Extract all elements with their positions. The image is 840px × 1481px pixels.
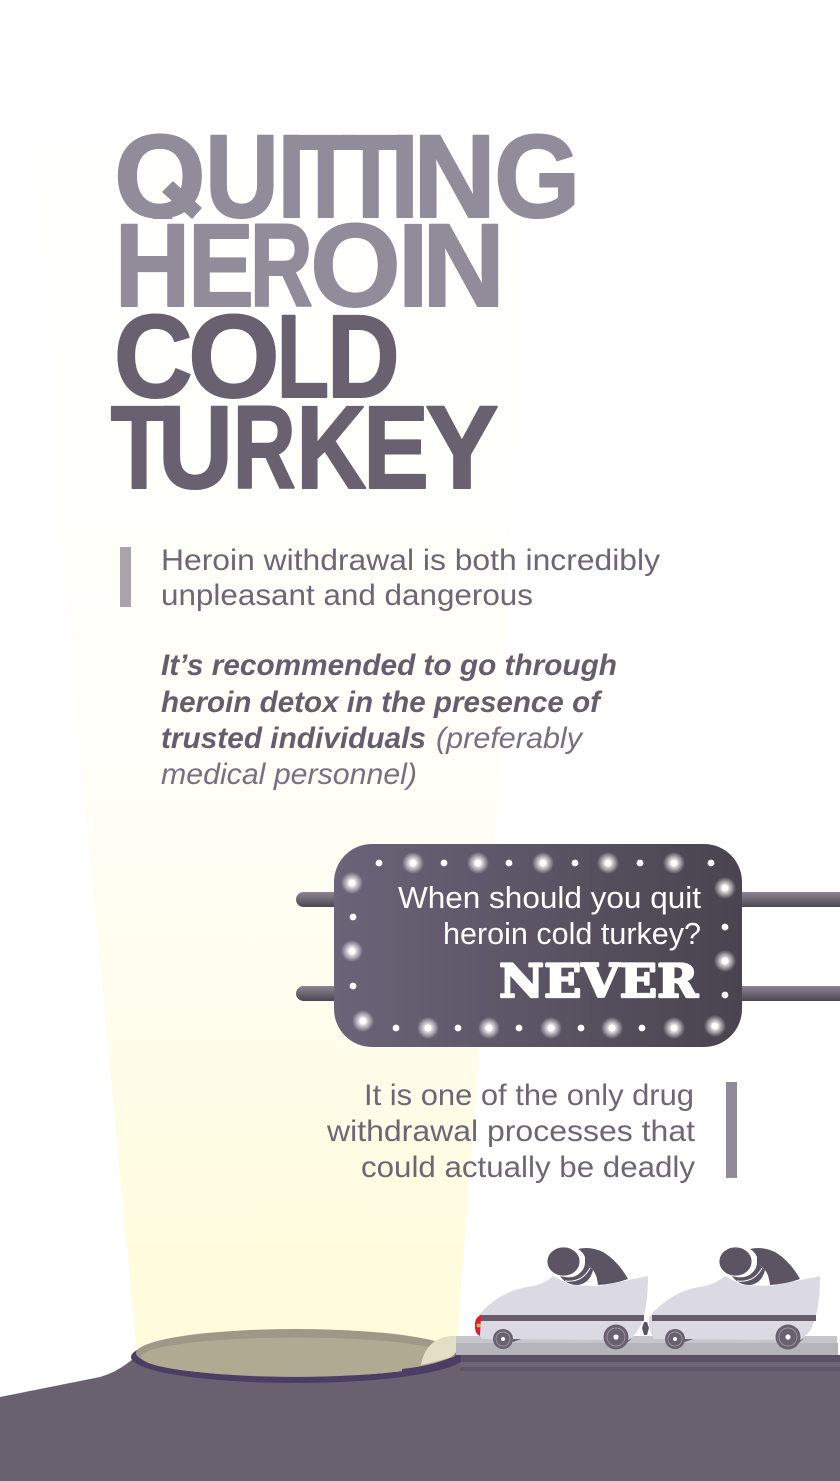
title line: TURKEY: [111, 381, 499, 514]
title line: COLD: L: [277, 291, 329, 422]
marquee sign: [334, 844, 742, 1047]
road: [402, 1355, 840, 1373]
title line: TURKEY: U: [158, 381, 233, 513]
track platform: [421, 1336, 838, 1365]
car body: [649, 1276, 820, 1340]
sign bulbs: dots: [349, 860, 728, 1031]
ground: [0, 1355, 840, 1481]
driver: [547, 1247, 628, 1285]
sign question: When should you quit: [398, 880, 701, 915]
title line: QUITTING: I: [390, 111, 419, 243]
title line: HEROIN: R: [250, 199, 313, 331]
sign rails: [296, 892, 840, 1001]
title line: HEROIN: N: [422, 199, 505, 331]
taillight: [475, 1315, 481, 1336]
title line: QUITTING: G: [494, 111, 580, 243]
deadly text block: withdrawal processes that: [326, 1115, 696, 1148]
recommendation text block: trusted individuals: [161, 722, 426, 755]
car body: [477, 1276, 648, 1340]
recommendation text block: [161, 649, 617, 791]
title line: QUITTING: N: [413, 110, 496, 242]
recommendation text block: It’s recommended to go through: [161, 649, 617, 682]
title line: QUITTING: U: [205, 111, 279, 243]
sign question: heroin cold turkey?: [443, 916, 701, 951]
intro text block: [161, 544, 660, 612]
portal: [131, 1329, 461, 1383]
title line: TURKEY: E: [363, 383, 429, 514]
sign board: [334, 844, 742, 1047]
title line: HEROIN: O: [310, 199, 401, 331]
title line: HEROIN: E: [188, 201, 254, 332]
title line: QUITTING: T: [340, 111, 401, 243]
title line: QUITTING: Q: [114, 111, 206, 243]
title: [110, 134, 574, 490]
sign answer: NEVER: NEVER: [499, 954, 699, 1008]
wheels: [665, 1324, 804, 1350]
accent bar: deadly: [726, 1082, 737, 1178]
title line: COLD: [114, 291, 400, 423]
title line: COLD: D: [327, 292, 400, 423]
car stripe: [480, 1315, 644, 1321]
recommendation text block: medical personnel): [161, 758, 417, 791]
spotlight beam: [30, 120, 525, 1352]
title line: QUITTING: T: [296, 111, 356, 243]
title line: HEROIN: H: [115, 199, 190, 331]
wheels: [493, 1324, 632, 1350]
deadly text block: It is one of the only drug: [364, 1079, 694, 1112]
sign bulbs: glowing: [341, 852, 736, 1039]
title line: TURKEY: Y: [425, 383, 499, 514]
roller coaster car 1: [475, 1247, 649, 1350]
deadly text block: could actually be deadly: [361, 1151, 695, 1184]
title line: QUITTING: [118, 134, 574, 219]
title line: QUITTING: I: [277, 111, 306, 243]
title line: TURKEY: R: [233, 381, 296, 513]
sign question: [398, 880, 701, 951]
car stripe: [652, 1315, 816, 1321]
driver: [719, 1247, 800, 1285]
title line: HEROIN: I: [398, 200, 428, 332]
accent bar: intro: [120, 547, 131, 607]
title line: TURKEY: T: [111, 381, 168, 514]
recommendation text block: heroin detox in the presence of: [161, 686, 603, 719]
recommendation text block: (preferably: [436, 722, 584, 755]
coupling: [642, 1322, 649, 1335]
title line: COLD: O: [188, 291, 280, 423]
title line: TURKEY: K: [296, 381, 366, 513]
deadly text block: [326, 1079, 696, 1184]
title line: HEROIN: [115, 199, 505, 332]
title line: COLD: C: [114, 291, 193, 423]
intro text block: unpleasant and dangerous: [161, 579, 533, 612]
roller coaster car 2: [649, 1247, 820, 1350]
intro text block: Heroin withdrawal is both incredibly: [161, 544, 660, 577]
